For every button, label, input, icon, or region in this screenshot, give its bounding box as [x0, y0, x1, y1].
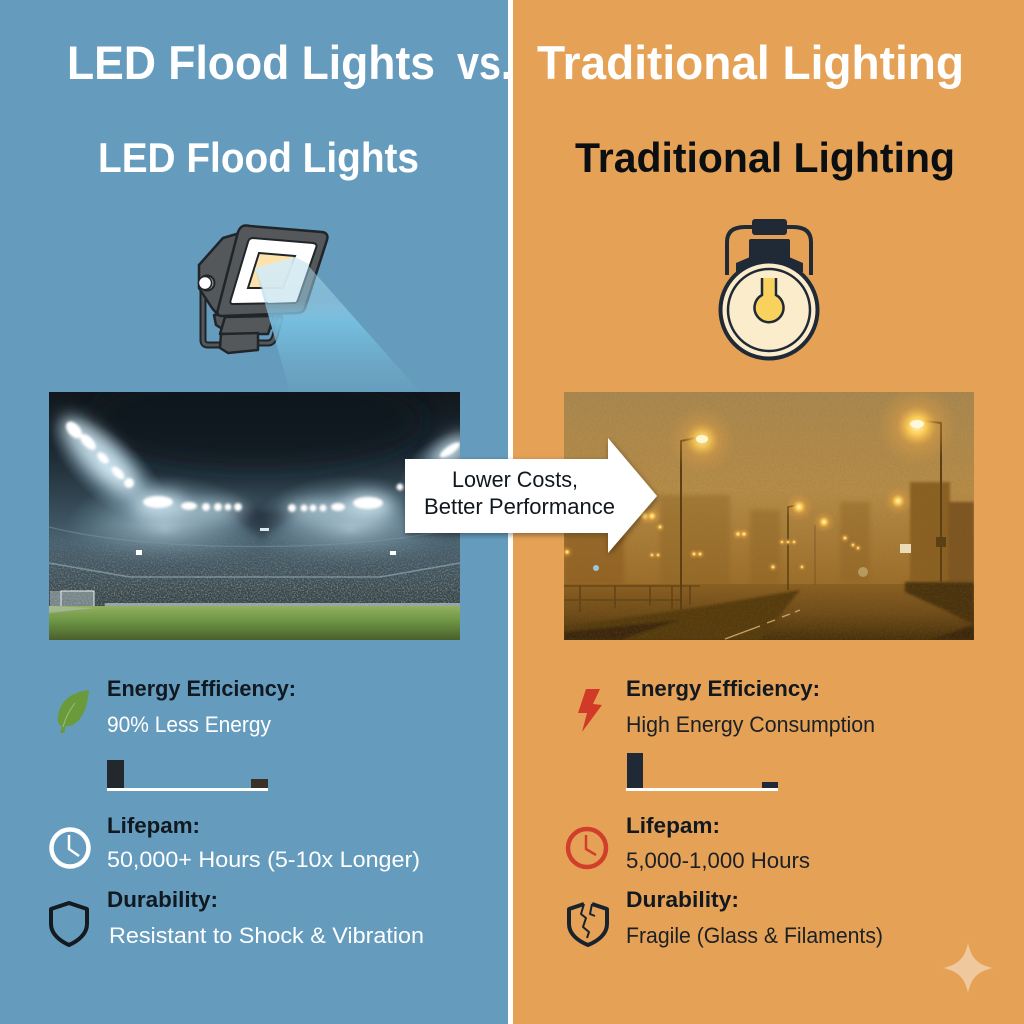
text: traditional energy efficiency: High Energy Consumption — [626, 712, 875, 737]
stands — [49, 528, 436, 606]
text: traditional lifespan — [626, 813, 810, 873]
icon: cracked shield — [569, 904, 607, 945]
photo: stadium under LED flood lights — [49, 392, 460, 640]
text: traditional energy efficiency: Energy Efficiency: — [626, 676, 820, 701]
heading: Traditional Lighting: Traditional Lighting — [575, 134, 955, 181]
lamps — [676, 414, 728, 466]
title: LED Flood Lights — [67, 36, 435, 89]
text: traditional durability — [626, 887, 883, 948]
text: traditional durability: Fragile (Glass & Filaments) — [626, 923, 883, 948]
text: LED energy efficiency: 90% Less Energy — [107, 712, 272, 737]
arrow: lower costs, better performance — [405, 438, 657, 553]
field — [49, 606, 460, 640]
text: LED durability: Durability: — [107, 887, 218, 912]
haze below lights — [75, 479, 258, 558]
arrow: lower costs, better performance: Better Performance — [424, 494, 615, 519]
icon: white clock — [52, 830, 88, 866]
text: LED lifespan: 50,000+ Hours (5-10x Longer) — [107, 847, 420, 872]
knob — [200, 276, 214, 290]
text: LED energy efficiency: Energy Efficiency: — [107, 676, 296, 701]
road and fence — [564, 584, 974, 640]
mounting arm — [203, 288, 280, 345]
heading: LED Flood Lights: LED Flood Lights — [98, 134, 419, 181]
text: traditional lifespan: 5,000-1,000 Hours — [626, 848, 810, 873]
bar chart: traditional energy — [626, 753, 778, 791]
goal — [50, 591, 94, 606]
buildings in fog — [660, 495, 870, 570]
title: vs. — [457, 36, 512, 89]
text: traditional energy efficiency — [626, 676, 875, 737]
text: traditional lifespan: Lifepam: — [626, 813, 720, 838]
title — [67, 36, 964, 89]
poles — [681, 421, 941, 610]
photo: foggy street with traditional lamps — [561, 386, 974, 640]
dark roof wedge — [108, 421, 416, 480]
panel: traditional lighting background — [513, 0, 1024, 1024]
icon: LED flood light with beam — [198, 226, 420, 392]
text: LED durability — [107, 887, 424, 948]
text: traditional durability: Durability: — [626, 887, 739, 912]
icon: green leaf — [58, 690, 89, 733]
icon: shield — [51, 903, 87, 945]
icon: red lightning bolt — [578, 689, 602, 732]
bar chart: LED energy — [107, 760, 268, 791]
floodlight halos — [52, 407, 475, 519]
text: LED energy efficiency — [107, 676, 296, 737]
icon: traditional lamp — [720, 219, 818, 358]
panel: LED flood lights background — [0, 0, 509, 1024]
icon: sparkle watermark — [943, 943, 993, 993]
title: Traditional Lighting — [537, 36, 964, 89]
text: LED durability: Resistant to Shock & Vibration — [109, 923, 424, 948]
text: LED lifespan — [107, 813, 420, 872]
light beam — [255, 262, 420, 392]
icon: red clock — [568, 829, 606, 867]
arrow: lower costs, better performance: Lower Costs, — [452, 467, 578, 492]
rear housing — [199, 233, 240, 315]
text: LED lifespan: Lifepam: — [107, 813, 200, 838]
front frame — [218, 226, 327, 316]
